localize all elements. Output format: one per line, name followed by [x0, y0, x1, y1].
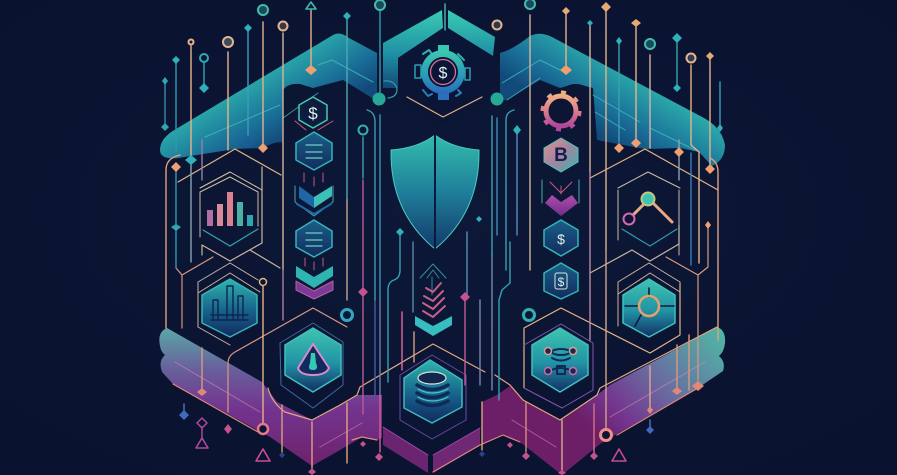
shield — [391, 135, 479, 249]
hexagon: coin stack — [400, 355, 466, 439]
hexagon: target — [618, 263, 680, 337]
left icon column — [295, 97, 333, 299]
right icon column: $ — [557, 231, 565, 247]
node markers: circles and hexes — [188, 0, 696, 440]
signal lines right — [465, 8, 720, 470]
top ribbon band — [160, 10, 725, 166]
signal lines left — [165, 4, 445, 470]
node markers: triangles — [196, 2, 626, 461]
right icon column: $ — [558, 275, 565, 289]
hexagon: bar chart — [200, 172, 262, 246]
node markers: diamonds — [161, 2, 723, 475]
hexagon: database network — [524, 324, 593, 408]
hexagon: node chart — [618, 172, 680, 255]
lower ribbon band — [159, 327, 725, 475]
upward arrow with chevrons — [415, 264, 452, 336]
right icon column — [542, 92, 580, 299]
right icon column: B — [554, 145, 568, 166]
hexagon: warning drop — [280, 323, 343, 408]
hexagon: line chart — [198, 263, 260, 345]
left icon column: $ — [308, 104, 318, 123]
center gear hexagon — [398, 28, 493, 125]
center gear hexagon: $ — [439, 65, 448, 82]
left and right roof lines — [176, 149, 718, 420]
